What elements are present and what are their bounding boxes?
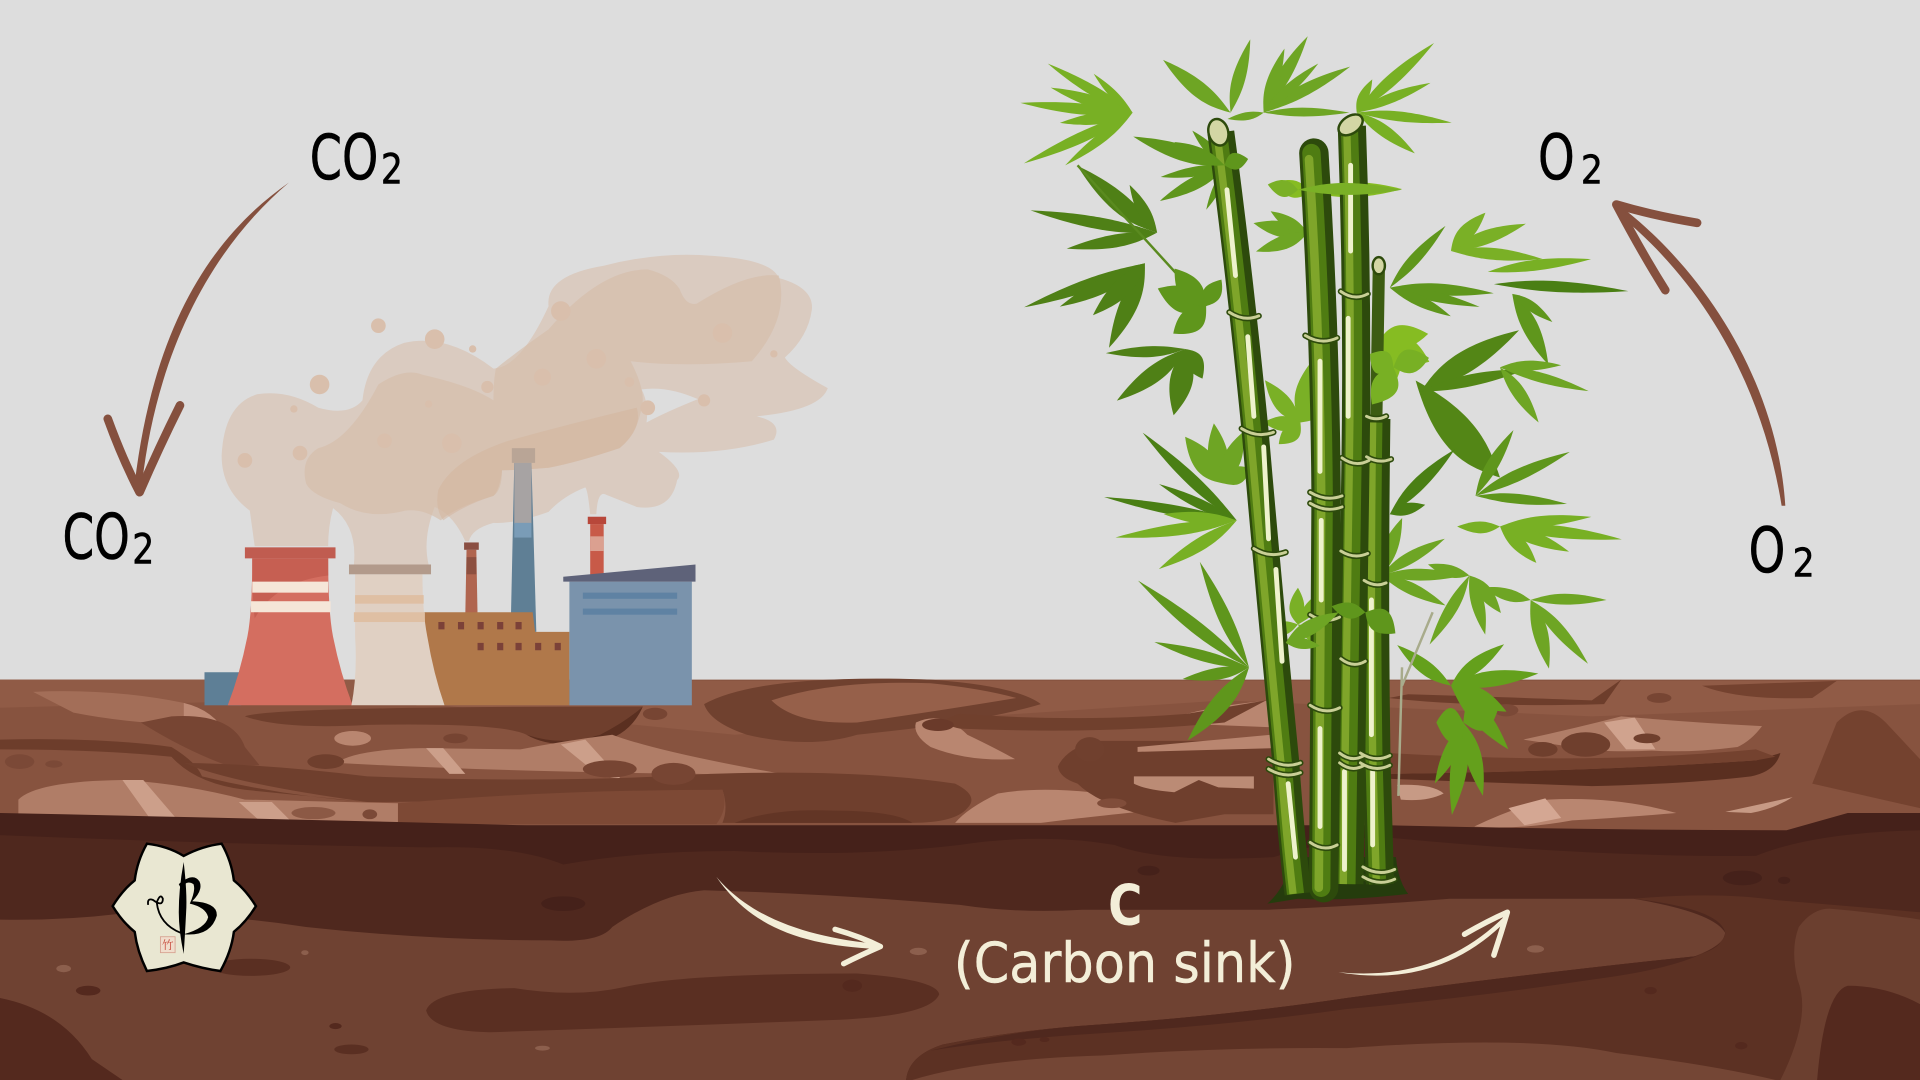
arrow: cream left: [716, 877, 880, 964]
cooling tower red: [228, 547, 353, 705]
label: CO2 lower: 2: [132, 524, 154, 573]
low blue shed: [204, 672, 241, 705]
factory: [204, 448, 696, 705]
monogram: [148, 862, 217, 954]
label: CO2 top: 2: [381, 145, 403, 194]
arrow: CO2 descending: [108, 182, 289, 492]
bamboo plant: [1020, 33, 1629, 904]
bamboo stem 1: [1217, 132, 1298, 894]
bamboo leaves behind: [1020, 33, 1629, 816]
bamboo leaves in front: [1171, 137, 1432, 650]
label: O2 lower: 2: [1793, 542, 1815, 587]
blue building: [563, 564, 696, 705]
seal: 竹: [162, 937, 174, 953]
cooling tower beige: [349, 564, 444, 705]
panel: deep soil layers: [0, 813, 1920, 1080]
label: O2 top: O: [1538, 121, 1575, 194]
bamboo stem 2: [1309, 153, 1326, 888]
bamboo nodes: [1229, 291, 1395, 882]
label: CO2 lower: CO: [62, 500, 130, 573]
bamboo cut tops: [1205, 110, 1385, 274]
arrow: cream right: [1338, 912, 1507, 976]
chimney red: [588, 517, 606, 576]
bamboo stem 4: [1371, 272, 1380, 884]
bamboo base: [1267, 857, 1408, 904]
smoke plumes: [222, 255, 828, 564]
label: carbon: C: [1108, 873, 1142, 938]
sky background: [0, 0, 1920, 686]
chimney blue-grey: [511, 448, 536, 632]
panel: upper soil layer: [0, 679, 1920, 845]
logo badge: [113, 844, 256, 971]
chimney brown: [464, 542, 479, 615]
bamboo stem 3: [1343, 126, 1356, 884]
label: CO2 top: CO: [310, 121, 378, 194]
label: O2 lower: O: [1749, 514, 1785, 587]
label: O2 top: 2: [1581, 149, 1603, 194]
label: carbon sink: (Carbon sink): [954, 931, 1296, 995]
badge shape: [113, 844, 256, 971]
arrow: O2 rising: [1616, 204, 1785, 506]
orange building: [416, 612, 569, 705]
